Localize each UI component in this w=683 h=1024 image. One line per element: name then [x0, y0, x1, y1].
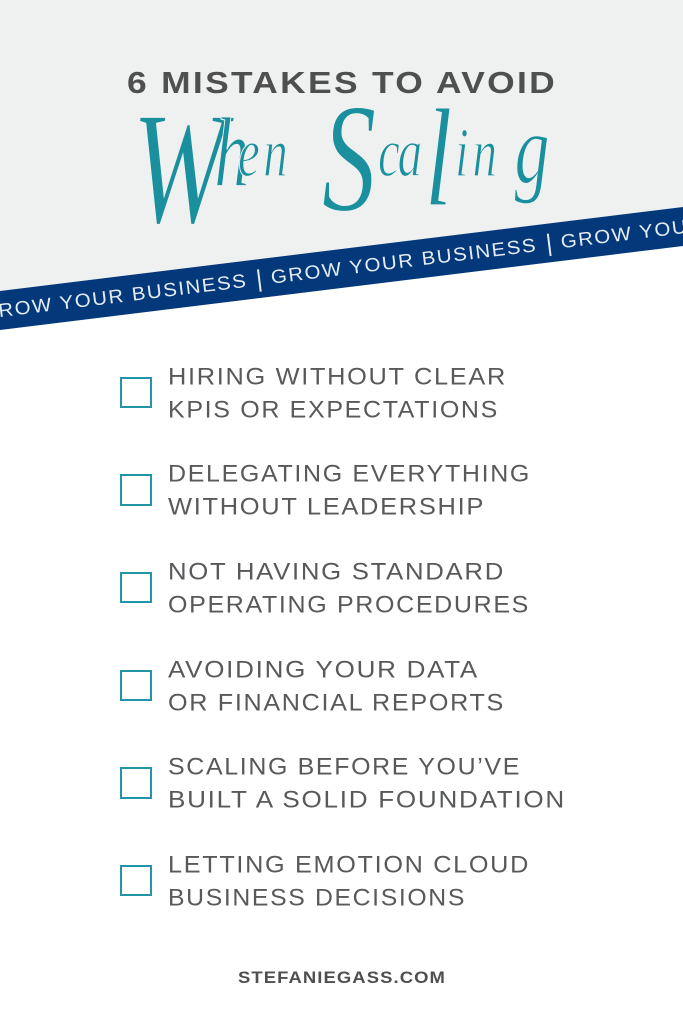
banner: grow your business ribbon: | — [254, 265, 265, 293]
item 4: avoiding data — [121, 656, 505, 716]
banner: grow your business ribbon: | — [544, 230, 555, 257]
heading: script title: c — [378, 115, 400, 192]
item 4: avoiding data: OR FINANCIAL REPORTS — [168, 690, 505, 716]
item 5: scaling before foundation: BUILT A SOLID FOUNDATION — [168, 786, 566, 814]
item 1: hiring without clear KPIs: HIRING WITHOUT CLEAR — [168, 364, 507, 390]
panel: grey header background — [0, 0, 683, 291]
item 6: letting emotion cloud decisions: LETTING EMOTION CLOUD — [168, 852, 530, 878]
heading: 6 mistakes to avoid: 6 MISTAKES TO AVOID — [127, 66, 557, 100]
item 2: delegating everything: WITHOUT LEADERSHIP — [168, 494, 485, 520]
heading: script title: W — [132, 79, 234, 257]
item 3: standard operating procedures: NOT HAVING STANDARD — [168, 558, 505, 586]
heading: script title: h — [214, 97, 249, 208]
heading: script title: n — [472, 115, 497, 192]
item 3: standard operating procedures: OPERATING PROCEDURES — [168, 592, 530, 618]
item 5: scaling before foundation — [121, 754, 566, 814]
item 2: delegating everything: DELEGATING EVERYTHING — [168, 460, 531, 488]
item 2: delegating everything — [121, 460, 531, 520]
item 6: letting emotion cloud decisions — [121, 852, 530, 912]
heading: script title — [132, 72, 549, 257]
footer: website: STEFANIEGASS.COM — [238, 968, 446, 987]
heading: script title: n — [263, 115, 288, 192]
item 6: letting emotion cloud decisions: BUSINESS DECISIONS — [168, 884, 466, 912]
heading: script title: a — [398, 115, 422, 192]
heading: script title: g — [514, 94, 549, 205]
heading: script title: l — [425, 81, 452, 236]
item 1: hiring without clear KPIs — [121, 364, 507, 424]
banner: grow your business ribbon: GROW YOUR BUSINESS — [270, 235, 538, 289]
heading: script title: i — [455, 115, 469, 192]
item 3: standard operating procedures — [121, 558, 530, 618]
item 5: scaling before foundation: SCALING BEFORE YOU’VE — [168, 754, 521, 780]
heading: script title: S — [322, 72, 376, 244]
heading: script title: e — [238, 115, 260, 192]
banner: grow your business ribbon — [0, 196, 683, 330]
checklist — [121, 364, 566, 912]
item 4: avoiding data: AVOIDING YOUR DATA — [168, 656, 479, 684]
item 1: hiring without clear KPIs: KPIS OR EXPECTATIONS — [168, 396, 499, 424]
